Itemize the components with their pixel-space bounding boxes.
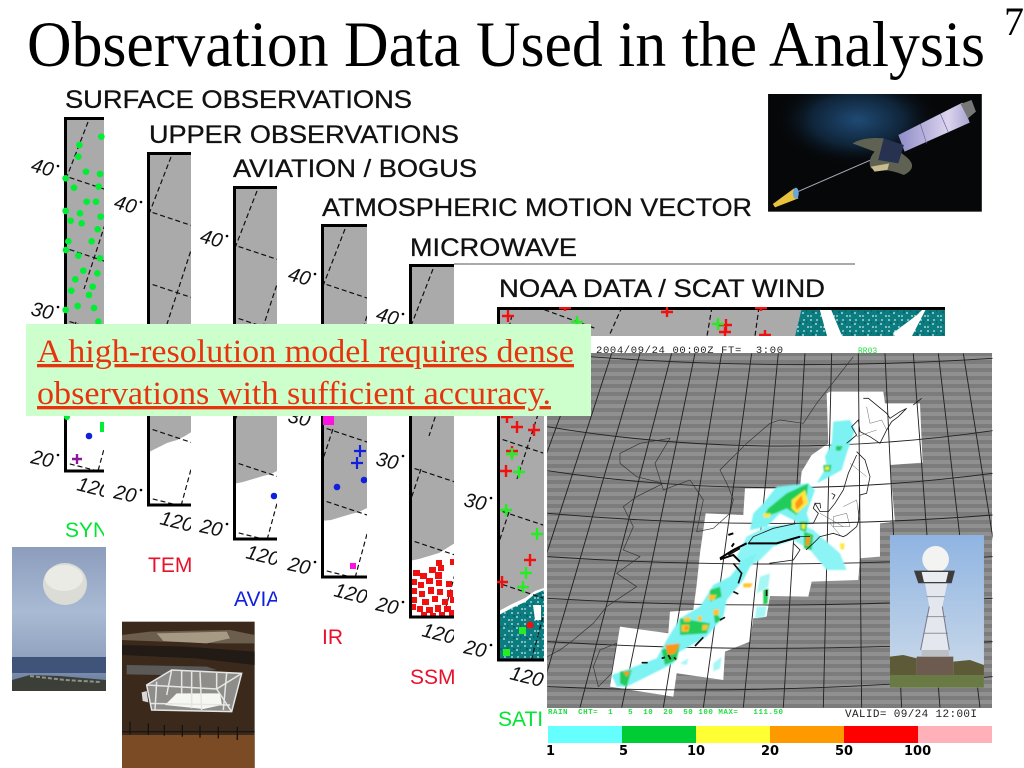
panel: microwave: MICROWAVE bbox=[410, 234, 577, 262]
panel: aviation / bogus: 20 bbox=[197, 515, 224, 542]
main column of map: SATI bbox=[498, 708, 543, 731]
color scale labels: 50 bbox=[835, 744, 853, 759]
title: Observation Data Used in the Analysis bbox=[27, 9, 985, 81]
panel: noaa data / scat wind: NOAA DATA / SCAT WIND bbox=[499, 275, 825, 303]
rain retrieval points bbox=[409, 559, 455, 617]
panel: upper observations: UPPER OBSERVATIONS bbox=[149, 121, 459, 149]
map product code: RR03 bbox=[858, 347, 877, 356]
photo: weather balloon bbox=[12, 547, 106, 691]
panel: atmospheric motion vector: ATMOSPHERIC MOTION VECTOR bbox=[322, 194, 752, 222]
top strip of map bbox=[497, 307, 945, 336]
callout bbox=[26, 324, 591, 416]
panel: upper observations: TEMP bbox=[148, 554, 206, 577]
panel: microwave: 20 bbox=[373, 593, 400, 620]
panel: atmospheric motion vector: 20 bbox=[285, 553, 312, 580]
surface station dots bbox=[62, 133, 105, 325]
panel: microwave: 40 bbox=[374, 304, 401, 331]
panel: microwave: 120 bbox=[420, 620, 457, 649]
continental coastlines bbox=[547, 357, 853, 687]
color scale labels: 10 bbox=[687, 744, 705, 759]
panel: aviation / bogus bbox=[197, 155, 477, 611]
chart: radar rainfall map bbox=[547, 346, 993, 717]
panel: upper observations: 40 bbox=[112, 192, 139, 219]
color scale labels: 1 bbox=[546, 744, 555, 759]
panel: noaa data / scat wind bbox=[461, 275, 945, 731]
panel: atmospheric motion vector: 30 bbox=[286, 405, 312, 432]
color scale labels: 20 bbox=[761, 744, 779, 759]
panel: aviation / bogus: 120 bbox=[244, 542, 281, 571]
photo: satellite bbox=[768, 94, 982, 212]
panel: aviation / bogus: AVIA bbox=[234, 588, 280, 611]
panel: surface observations: 30 bbox=[29, 298, 55, 325]
panel: aviation / bogus: AVIATION / BOGUS bbox=[233, 155, 477, 183]
panel: microwave bbox=[373, 234, 855, 689]
panel: upper observations bbox=[111, 121, 459, 577]
panel: surface observations bbox=[28, 86, 412, 542]
map header text: 2004/09/24 00:00Z FT= 3:00 bbox=[596, 345, 783, 357]
color scale labels bbox=[546, 744, 931, 759]
panel: surface observations: SYNOP bbox=[65, 519, 139, 542]
panel: upper observations: 20 bbox=[111, 481, 138, 508]
map rain legend text: RAIN CHT= 1 5 10 20 50 100 MAX= 111.50 bbox=[548, 709, 783, 717]
page number: 7 bbox=[1004, 0, 1024, 44]
callout: A high-resolution model requires dense bbox=[37, 334, 574, 370]
main column of map bbox=[497, 416, 545, 731]
panel: aviation / bogus: 40 bbox=[198, 226, 225, 253]
main column of map: 120 bbox=[508, 663, 545, 692]
map valid time: VALID= 09/24 12:00I bbox=[845, 709, 977, 721]
photo: radar tower bbox=[890, 535, 984, 688]
panel: surface observations: SURFACE OBSERVATIONS bbox=[65, 86, 412, 114]
panel: atmospheric motion vector bbox=[285, 194, 752, 649]
panel: noaa data / scat wind: 30 bbox=[462, 489, 488, 516]
panel: surface observations: 120 bbox=[75, 474, 112, 503]
graticule bbox=[547, 353, 993, 708]
photo: ground instrument bbox=[122, 622, 255, 768]
coastlines: hokkaido and honshu bbox=[748, 398, 922, 563]
panel: upper observations: 120 bbox=[158, 508, 195, 537]
panel: microwave: 30 bbox=[374, 448, 400, 475]
panel: atmospheric motion vector: 120 bbox=[332, 580, 369, 609]
panel: surface observations: 40 bbox=[29, 155, 56, 182]
color scale labels: 100 bbox=[904, 744, 931, 759]
color scale labels: 5 bbox=[619, 744, 628, 759]
panel: surface observations: 20 bbox=[28, 446, 55, 473]
panel: microwave: SSMI bbox=[410, 666, 461, 689]
panel: noaa data / scat wind: 20 bbox=[461, 636, 488, 663]
panel: atmospheric motion vector: IR bbox=[322, 626, 343, 649]
radar coverage area bbox=[610, 392, 923, 697]
rain: southwest islands bbox=[612, 548, 770, 687]
rain: northern japan bbox=[720, 398, 922, 570]
color scale bar bbox=[546, 726, 992, 759]
panel: atmospheric motion vector: 40 bbox=[286, 264, 313, 291]
callout: observations with sufficient accuracy. bbox=[37, 376, 551, 412]
